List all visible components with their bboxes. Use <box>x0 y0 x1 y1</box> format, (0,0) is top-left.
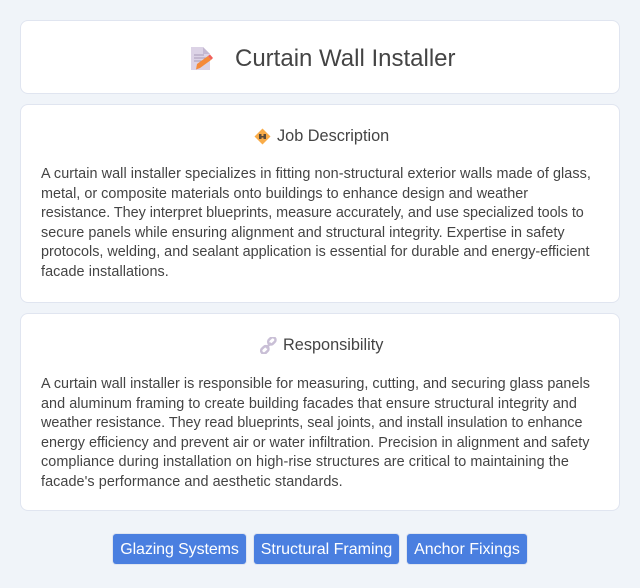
text block: responsibility <box>41 376 590 490</box>
text block: job description: metal, or composite materials onto buildings to enhance design and weather <box>41 186 528 202</box>
tag: structural framing <box>254 534 399 564</box>
heading: responsibility: Responsibility <box>283 336 383 354</box>
text block: responsibility: compliance during installation on high-rise structures are critical to maintaining the <box>41 454 569 470</box>
tag: glazing systems: Glazing Systems <box>120 541 239 558</box>
tag: anchor fixings: Anchor Fixings <box>414 541 520 558</box>
tag: glazing systems <box>113 534 246 564</box>
text block: job description: facade installations. <box>41 264 169 280</box>
panel: title card <box>20 20 620 94</box>
icon: document with pencil <box>191 47 213 70</box>
text block: responsibility: and aluminum framing to create building facades that ensure structural integrity and <box>41 396 577 412</box>
text block: responsibility: A curtain wall installer is responsible for measuring, cutting, and securing glass panels <box>41 376 590 392</box>
text block: job description: A curtain wall installer specializes in fitting non-structural exterior walls made of glass, <box>41 166 591 182</box>
panel: responsibility <box>20 313 620 511</box>
icon: chain link <box>260 337 277 354</box>
text block: job description: resistance. They interpret blueprints, measure accurately, and use specialized tools to <box>41 205 584 221</box>
text block: job description: secure panels while ensuring alignment and structural integrity. Expertise in safety <box>41 224 565 240</box>
text block: job description: protocols, welding, and sealant application is essential for durable and energy-efficient <box>41 244 590 260</box>
tag: structural framing: Structural Framing <box>261 541 392 558</box>
text block: responsibility: weather resistance. They read blueprints, seal joints, and install insulation to enhance <box>41 415 582 431</box>
title: Curtain Wall Installer <box>235 45 456 72</box>
icon: diamond sign <box>254 128 270 144</box>
tag: anchor fixings <box>407 534 527 564</box>
text block: responsibility: facade's performance and aesthetic standards. <box>41 474 343 490</box>
text block: responsibility: energy efficiency and prevent air or water infiltration. Precision in alignment and safety <box>41 434 589 450</box>
panel: job description <box>20 104 620 303</box>
heading: job description: Job Description <box>277 127 389 145</box>
text block: job description <box>41 166 591 280</box>
